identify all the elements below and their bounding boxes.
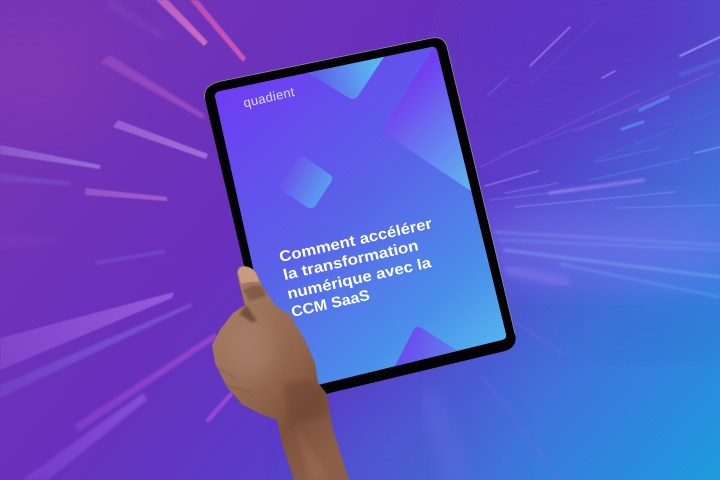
hand silhouette <box>212 266 349 480</box>
wrist crease shading <box>283 381 328 425</box>
finger shadow <box>240 305 257 322</box>
title: numérique avec la <box>286 254 434 303</box>
thumb knuckle <box>243 286 266 301</box>
screen shapes <box>283 47 472 366</box>
title: CCM SaaS <box>290 287 371 321</box>
shape: large right diamond <box>384 47 472 192</box>
title <box>278 215 434 321</box>
light rays: left <box>0 0 246 480</box>
light rays: right <box>430 15 720 480</box>
camera dots <box>316 57 341 64</box>
forearm highlight <box>298 430 330 480</box>
back of hand highlight <box>226 320 274 380</box>
tablet metal edge <box>205 38 515 334</box>
title: Comment accélérer <box>278 215 434 266</box>
tablet <box>205 38 520 404</box>
shape: small square <box>280 156 332 208</box>
thumbnail <box>238 267 259 284</box>
finger folds <box>218 368 250 392</box>
hand holding tablet <box>212 266 349 480</box>
tablet frame <box>205 38 516 404</box>
tablet screen <box>215 47 506 394</box>
shape: bottom triangle <box>394 327 458 366</box>
shape: top triangle <box>308 56 384 100</box>
logo: quadient: quadient <box>242 84 296 110</box>
title: la transformation <box>282 237 420 284</box>
